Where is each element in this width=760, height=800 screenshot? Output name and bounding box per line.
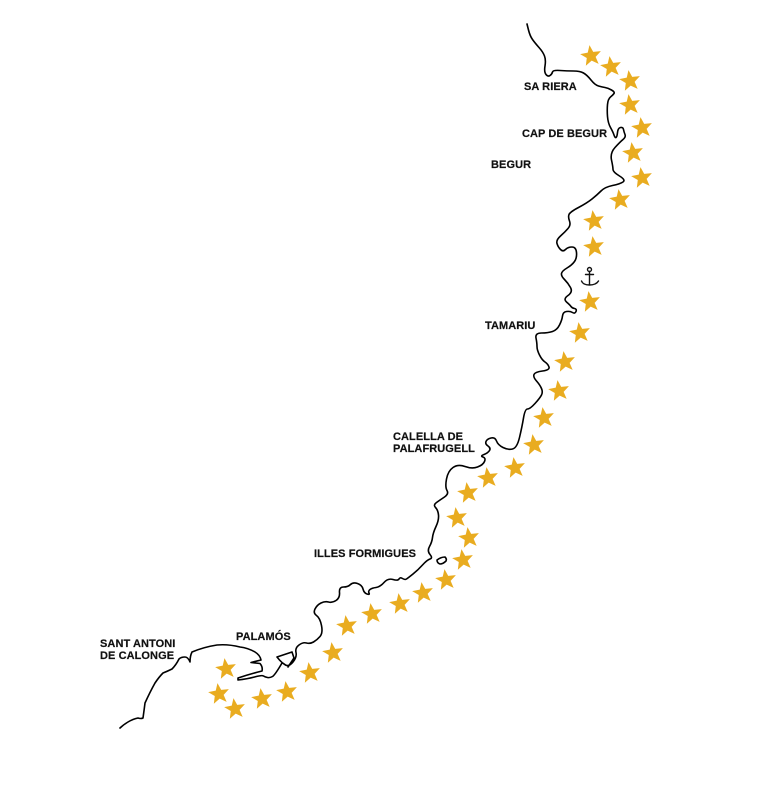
coastline map	[120, 24, 625, 728]
label: Sa Riera: SA RIERA	[524, 81, 577, 93]
label: Calella de Palafrugell: PALAFRUGELL	[393, 443, 475, 455]
label: Cap de Begur: CAP DE BEGUR	[522, 128, 607, 140]
label: Palamós: PALAMÓS	[236, 630, 291, 643]
label: Sant Antoni de Calonge: DE CALONGE	[100, 650, 174, 662]
icon: anchor	[582, 268, 598, 285]
label: Calella de Palafrugell: CALELLA DE	[393, 431, 463, 443]
label: Sant Antoni de Calonge: SANT ANTONI	[100, 638, 175, 650]
label: Begur: BEGUR	[491, 159, 531, 171]
label: Illes Formigues: ILLES FORMIGUES	[314, 548, 416, 560]
star markers along the route	[207, 44, 654, 719]
label: Tamariu: TAMARIU	[485, 320, 535, 332]
